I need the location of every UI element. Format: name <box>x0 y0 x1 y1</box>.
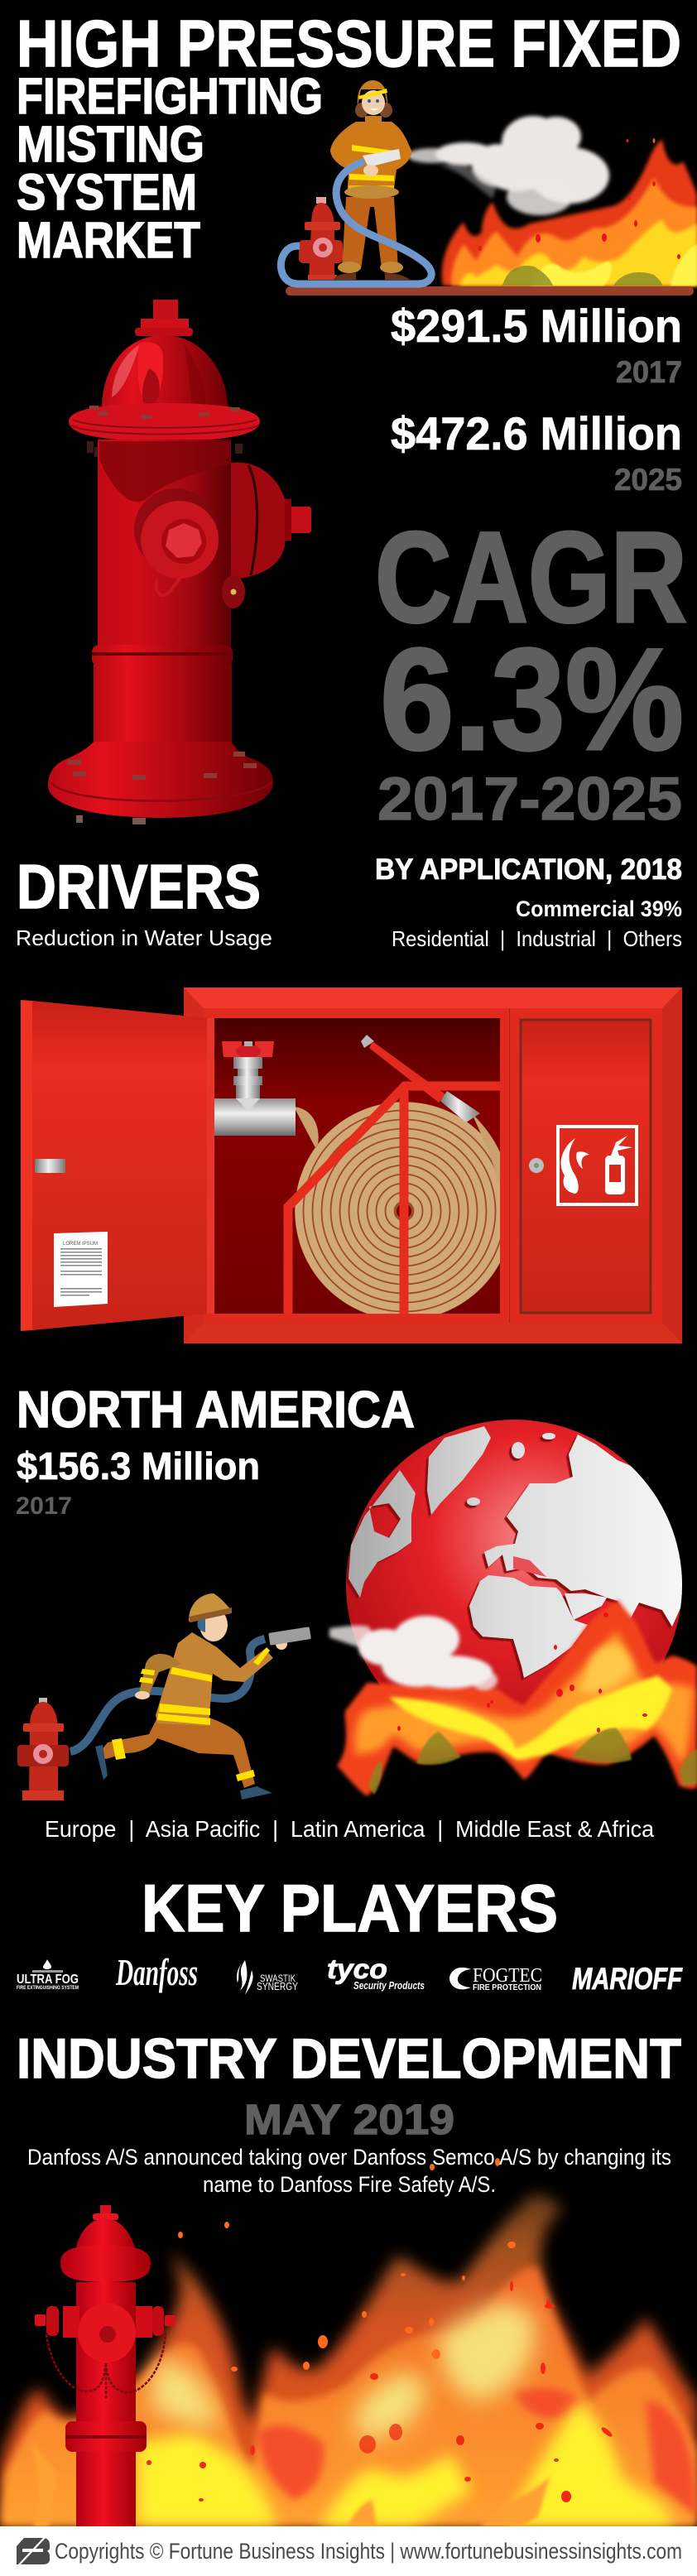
ground bar <box>286 286 694 296</box>
drivers heading: DRIVERS <box>17 852 261 921</box>
illustration: fire hose cabinet <box>21 988 682 1343</box>
door label <box>54 1232 108 1307</box>
cabinet interior <box>214 1018 500 1314</box>
open door <box>21 1000 214 1331</box>
embers <box>178 2158 516 2372</box>
development date: MAY 2019 <box>244 2096 454 2143</box>
logo: Swastik Synergy <box>237 1960 298 1995</box>
CAGR block <box>375 506 687 833</box>
sparks <box>147 2281 613 2502</box>
icon: fire extinguisher sign <box>558 1127 637 1204</box>
key player logos <box>17 1951 683 1996</box>
icon: large red fire hydrant <box>48 300 311 824</box>
year 2017: 2017 <box>616 355 682 389</box>
icon: globe <box>346 1420 682 1708</box>
icon: water mist <box>407 116 609 215</box>
icon: blue hose <box>281 161 431 284</box>
commercial share: Commercial 39% <box>516 896 682 921</box>
icon: coiled hose <box>294 1102 513 1320</box>
illustration: firefighter extinguishing fire <box>281 80 697 296</box>
logo: Fogtec <box>449 1965 542 1992</box>
logo: Ultra Fog: FIRE EXTINGUISHING SYSTEM <box>17 1986 79 1991</box>
title <box>17 7 681 268</box>
key players heading: KEY PLAYERS <box>142 1872 558 1946</box>
icon: top flames <box>442 138 697 286</box>
logo: Danfoss: Danfoss <box>115 1951 198 1993</box>
title line 2: FIREFIGHTING <box>17 68 323 124</box>
icon: mist <box>329 1616 498 1690</box>
title line 4: SYSTEM <box>17 164 197 220</box>
bottom flames <box>0 2158 697 2526</box>
illustration: globe on fire <box>17 1420 697 1800</box>
footer <box>0 2526 697 2576</box>
development text <box>27 2145 671 2197</box>
icon: small hydrant <box>299 197 343 280</box>
logo: Tyco <box>327 1954 425 1992</box>
market value 2017 <box>391 300 682 389</box>
icon: door lock <box>529 1158 544 1173</box>
icon: hydrant chains <box>46 2333 166 2399</box>
icon: small hydrant <box>17 1698 69 1800</box>
icon: globe flames <box>337 1600 697 1796</box>
development text line 2: name to Danfoss Fire Safety A/S. <box>203 2172 496 2197</box>
logo: Tyco: Security Products <box>353 1979 425 1992</box>
application block <box>375 853 682 951</box>
logo: Ultra Fog <box>17 1959 79 1991</box>
market value 2017: $291.5 Million <box>391 300 682 352</box>
market value 2025: $472.6 Million <box>391 407 682 459</box>
logo: Ultra Fog: ULTRA FOG <box>17 1973 79 1987</box>
north america value: $156.3 Million <box>17 1444 260 1487</box>
door label: LOREM IPSUM <box>63 1242 98 1247</box>
icon: hydrant in flames <box>35 2205 175 2526</box>
icon: company logo <box>17 2538 50 2564</box>
icon: nozzle <box>363 149 401 176</box>
title line 5: MARKET <box>17 212 200 268</box>
icon: hose <box>70 1639 265 1752</box>
right door <box>521 1020 651 1313</box>
CAGR period: 2017-2025 <box>377 766 682 833</box>
drivers text: Reduction in Water Usage <box>16 925 272 950</box>
year 2025: 2025 <box>614 463 682 497</box>
logo: Tyco: tyco <box>327 1954 387 1984</box>
logo: Fogtec: FOGTEC <box>473 1965 542 1987</box>
north america heading: NORTH AMERICA <box>17 1382 415 1439</box>
logo: Swastik Synergy: SWASTIK <box>260 1973 296 1984</box>
logo: Fogtec: FIRE PROTECTION <box>473 1983 541 1992</box>
cabinet frame <box>184 988 682 1343</box>
icon: running firefighter <box>70 1593 311 1800</box>
icon: hose rack <box>288 1086 500 1314</box>
icon: valve <box>214 1041 296 1136</box>
market value 2025 <box>391 407 682 497</box>
title line 3: MISTING <box>17 116 204 172</box>
application block: BY APPLICATION, 2018 <box>375 853 682 886</box>
icon: firefighter <box>330 80 411 280</box>
north america year: 2017 <box>16 1492 72 1520</box>
other regions: Europe | Asia Pacific | Latin America | Middle East & Africa <box>45 1816 654 1842</box>
door handle <box>35 1159 65 1173</box>
logo: Swastik Synergy: SYNERGY <box>257 1980 298 1992</box>
icon: hose nozzle <box>361 1035 480 1122</box>
